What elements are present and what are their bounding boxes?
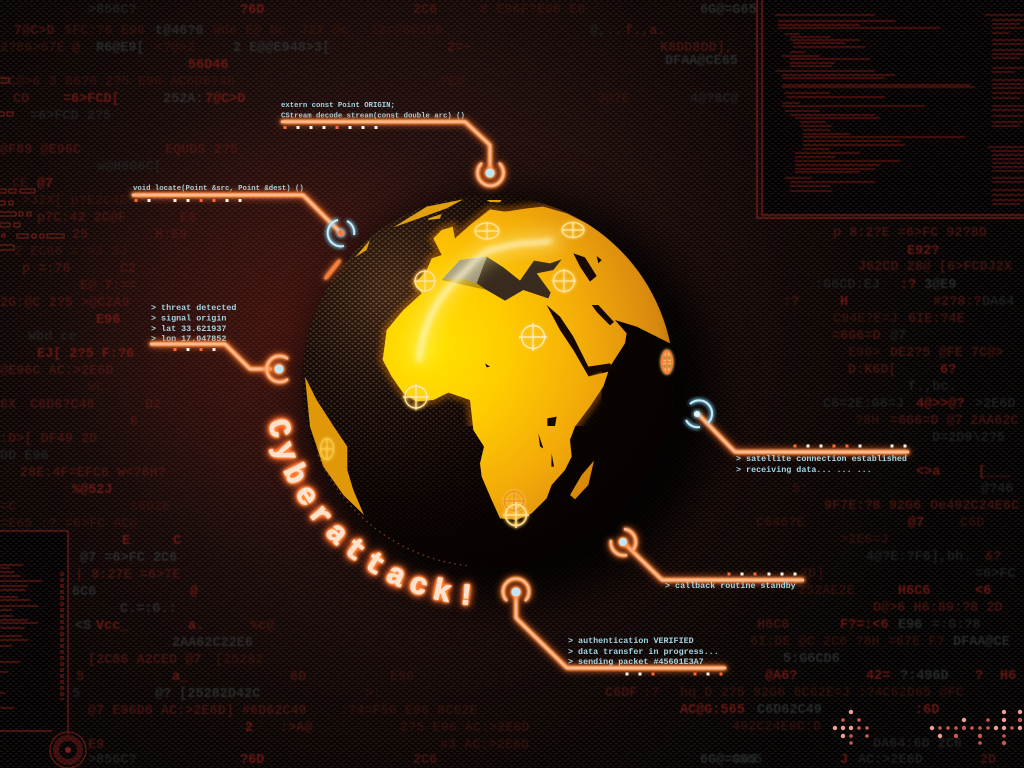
- background code text: scrolling hacker characters: 2 E@@E948>3[: [233, 41, 330, 56]
- background code text: scrolling hacker characters: 4@?8C@: [690, 92, 739, 107]
- background code text: scrolling hacker characters: DFAA@CE: [953, 635, 1010, 650]
- node icon: [328, 220, 354, 246]
- background code text: scrolling hacker characters: 2: [245, 721, 253, 736]
- node icon: [267, 356, 288, 382]
- background code text: scrolling hacker characters: E96>: [848, 346, 880, 361]
- reticle: North Africa: [519, 323, 547, 351]
- background code text: scrolling hacker characters: <6: [975, 584, 991, 599]
- text block: [568, 636, 719, 667]
- LED dot matrix arrow: [833, 710, 869, 745]
- background code text: scrolling hacker characters: @7: [37, 177, 53, 192]
- connector line: [132, 195, 341, 233]
- dial icon: [50, 732, 86, 768]
- background code text: scrolling hacker characters: Vcc_: [96, 619, 129, 634]
- background code text: scrolling hacker characters: @: [72, 41, 80, 56]
- background code text: scrolling hacker characters: 3@?E: [597, 92, 629, 107]
- background code text: scrolling hacker characters: 2 EC66 =:>3 3J: [14, 245, 127, 260]
- background code text: scrolling hacker characters: :G6CD:EJ: [815, 278, 880, 293]
- background code text: scrolling hacker characters: 2AA62C22E6: [172, 636, 253, 651]
- background code text: scrolling hacker characters: H: [840, 295, 848, 310]
- background code text: scrolling hacker characters: =G65: [730, 753, 762, 768]
- background code text: scrolling hacker characters: %@52J: [72, 483, 113, 498]
- background code text: scrolling hacker characters: p =:76: [22, 262, 71, 277]
- background code text: scrolling hacker characters: =6>FCD[: [63, 92, 120, 107]
- text block: > lon 17.047852: [151, 334, 226, 344]
- callout: callback routine (lower right): [611, 529, 804, 591]
- background code text: scrolling hacker characters: Wbd_ce: [28, 330, 77, 345]
- node icon: [686, 400, 712, 427]
- background code text: scrolling hacker characters: :>A@: [280, 721, 312, 736]
- background code text: scrolling hacker characters: CE: [12, 177, 28, 192]
- code text: extern const Point ORIGIN;: [281, 102, 395, 110]
- reticle: Iberia: [414, 270, 436, 292]
- text block: > authentication VERIFIED: [568, 636, 694, 646]
- background code text: scrolling hacker characters: 6D: [290, 670, 306, 685]
- background code text: scrolling hacker characters: CD: [13, 92, 29, 107]
- panel: code monitor top right: [757, 0, 1024, 218]
- background code text: scrolling hacker characters: | 8:27E =6>7E: [75, 568, 180, 583]
- background code text: scrolling hacker characters: D2: [145, 398, 161, 413]
- background code text: scrolling hacker characters: [2C86 A2CED @7: [88, 653, 201, 668]
- reticle: Europe: [475, 222, 499, 240]
- status dots: [794, 444, 906, 448]
- background code text: scrolling hacker characters: 2D]: [800, 567, 824, 582]
- reticle: limb east: [662, 350, 672, 374]
- background code text: scrolling hacker characters: R6@E9[: [96, 41, 145, 56]
- connector line: [516, 592, 726, 668]
- background code text: scrolling hacker characters: 5:G6CD6: [783, 652, 840, 667]
- background code text: scrolling hacker characters: 25: [72, 228, 88, 243]
- background code text: scrolling hacker characters: 2?5 E96 AC:>2E6D: [400, 721, 530, 736]
- background code text: scrolling hacker characters: =6>FCD 2?5: [30, 109, 111, 124]
- background code text: scrolling hacker characters: @?: [180, 262, 196, 277]
- background code text: scrolling hacker characters: 6X: [0, 398, 17, 413]
- background code text: scrolling hacker characters: <?@>2: [155, 41, 196, 56]
- background code text: scrolling hacker characters: 252AE2E: [798, 584, 855, 599]
- reticle: South Africa lower: [503, 502, 529, 528]
- text block: > lat 33.621937: [151, 324, 226, 334]
- background code text: scrolling hacker characters: J: [840, 753, 848, 768]
- background code text: scrolling hacker characters: =6>FC: [975, 567, 1016, 582]
- background code text: scrolling hacker characters: #2?8:?: [933, 295, 982, 310]
- background code text: scrolling hacker characters: D@>6 H6:89:?8 2D: [873, 601, 1003, 616]
- background code text: scrolling hacker characters: WC:: [88, 381, 112, 396]
- background code text: scrolling hacker characters: 7@C>D: [205, 92, 246, 107]
- Greenland strips: [355, 199, 502, 257]
- Red Sea, gulfs and lakes: [485, 253, 614, 467]
- background code text: scrolling hacker characters: C.=:G.:: [120, 602, 177, 617]
- status dots: [284, 126, 378, 129]
- background code text: scrolling hacker characters: DE2?5 @FE 7C@>: [890, 346, 1003, 361]
- background code text: scrolling hacker characters: >:: [365, 687, 381, 702]
- connector line: [698, 414, 909, 452]
- status dots: [728, 572, 796, 576]
- background code text: scrolling hacker characters: C6D6?C46: [30, 398, 95, 413]
- LED dot matrix waveform: [930, 710, 1022, 745]
- background code text: scrolling hacker characters: >856C?: [88, 3, 137, 18]
- small LED dash readouts at left edge: [0, 78, 64, 250]
- Bright light streak over Africa: [419, 238, 560, 362]
- text block: > receiving data... ... ...: [736, 465, 872, 475]
- background code text: scrolling hacker characters: @7: [890, 329, 906, 344]
- background code text: scrolling hacker characters: AC:>2E6D: [858, 753, 923, 768]
- Limb shading: [669, 341, 670, 342]
- background code text: scrolling hacker characters: ?:496D: [900, 669, 949, 684]
- background code text: scrolling hacker characters: 6I:DE @C 2C6 ?8H =67E F?: [750, 635, 944, 650]
- background code text: scrolling hacker characters: H6C6: [898, 584, 930, 599]
- background code text: scrolling hacker characters: f.,a.: [625, 24, 666, 39]
- background code text: scrolling hacker characters: ?E@: [440, 75, 464, 90]
- panel: code monitor bottom left with dial: [0, 531, 86, 768]
- background code text: scrolling hacker characters: H:E9: [155, 228, 187, 243]
- background code text: scrolling hacker characters: s6D2E: [130, 500, 171, 515]
- background code text: scrolling hacker characters: D=2D9\2?5: [932, 431, 1005, 446]
- background code text: scrolling hacker characters: EQUDS 2?5: [165, 143, 238, 158]
- background code text: scrolling hacker characters: C2: [120, 262, 136, 277]
- background code text: scrolling hacker characters: AC@G:565: [680, 703, 745, 718]
- background code text: scrolling hacker characters: E@ 7:==: [80, 279, 137, 294]
- background code text: scrolling hacker characters: :D>[ DF49 2D: [0, 432, 97, 447]
- background code text: scrolling hacker characters: EJ[ 2?5 F:?6: [37, 347, 134, 362]
- background code text: scrolling hacker characters: hq_D 2?5 92G6 8C62E=J :?4C62D65 @FC: [680, 686, 964, 701]
- background code text: scrolling hacker characters: a_: [172, 670, 189, 685]
- background code text: scrolling hacker characters: 492C24E6C:D: [732, 720, 821, 735]
- background code text: scrolling hacker characters: 9C@>6 3 86?6 2?5 E96 AC6D6?46: [0, 75, 235, 90]
- background code text: scrolling hacker characters: w@H6G6C[: [97, 160, 162, 175]
- background code text: scrolling hacker characters: 6: [130, 415, 138, 430]
- South America: [305, 377, 364, 515]
- background code text: scrolling hacker characters: J2X @c: [300, 24, 349, 39]
- background code text: scrolling hacker characters: @7 E96D6 AC:>2E6D] #6D62C49: [88, 704, 307, 719]
- background code text: scrolling hacker characters: @F89 @E96C: [0, 143, 81, 158]
- reticle: Middle East: [552, 269, 576, 293]
- callout: satellite connection (right): [686, 400, 909, 475]
- reticle: South Africa upper: [503, 490, 525, 512]
- connector line: [281, 122, 490, 172]
- background code text: scrolling hacker characters: DD E96: [0, 449, 49, 464]
- background code text: scrolling hacker characters: H6C6: [757, 618, 789, 633]
- background code text: scrolling hacker characters: @? [25282D42C: [155, 687, 260, 702]
- globe: [302, 195, 677, 567]
- background code text: scrolling hacker characters: Wde E@ bc: [213, 24, 286, 39]
- background code text: scrolling hacker characters: 252A:: [163, 92, 204, 107]
- background code text: scrolling hacker characters: 9F7E:?8 92G6: [824, 499, 921, 514]
- callout: decode stream (top): [281, 102, 504, 186]
- connector line: [623, 542, 804, 580]
- background code text: scrolling hacker characters: @E96C AC:>2E6D: [0, 364, 113, 379]
- background code text: scrolling hacker characters: F 5: [60, 670, 84, 685]
- background code text: scrolling hacker characters: @,..: [590, 24, 622, 39]
- status dots: [174, 348, 216, 351]
- background code text: scrolling hacker characters: 2G:@C 2?5 >@C2A9: [0, 296, 130, 311]
- text block: [736, 454, 907, 475]
- background code text: scrolling hacker characters: E92?: [907, 244, 939, 259]
- background code text: scrolling hacker characters: 5:: [792, 482, 808, 497]
- background code text: scrolling hacker characters: #3 AC:>2E6D: [440, 738, 529, 753]
- background code text: scrolling hacker characters: =:G:?8: [932, 618, 981, 633]
- mesh over Mediterranean: [442, 257, 562, 301]
- background code text: scrolling hacker characters: f.,bc.: [908, 380, 957, 395]
- background code text: scrolling hacker characters: 6G@=G65: [700, 3, 757, 18]
- background code text: scrolling hacker characters: =6G6=D @7: [890, 414, 963, 429]
- background code text: scrolling hacker characters: C6D: [960, 516, 984, 531]
- status dots: [134, 199, 242, 202]
- background code text: scrolling hacker characters: >856C?: [88, 753, 137, 768]
- dark halo behind globe: [307, 193, 717, 603]
- reticle: West Africa: [403, 384, 429, 410]
- background code text: scrolling hacker characters: C: [173, 534, 181, 549]
- background code text: scrolling hacker characters: 42=: [866, 669, 890, 684]
- background code text: scrolling hacker characters: ?6D: [240, 3, 264, 18]
- background code text: scrolling hacker characters: H6: [1000, 669, 1016, 684]
- background code text: scrolling hacker characters: DA64: [982, 295, 1014, 310]
- reticle: South America: [320, 438, 334, 460]
- background code text: scrolling hacker characters: p7C:42 2C@F: [37, 211, 126, 226]
- background code text: scrolling hacker characters: [25282: [215, 653, 264, 668]
- node icon: [611, 529, 636, 555]
- background code text: scrolling hacker characters: 2C6: [413, 3, 437, 18]
- node icon: [503, 579, 529, 601]
- background code text: scrolling hacker characters: Oe492C24E6C: [930, 499, 1019, 514]
- background code text: scrolling hacker characters: a.: [188, 619, 204, 634]
- background code text: scrolling hacker characters: :?: [643, 686, 659, 701]
- background code text: scrolling hacker characters: @: [190, 585, 198, 600]
- background code text: scrolling hacker characters: ?6D: [240, 753, 264, 768]
- background code text: scrolling hacker characters: E: [122, 534, 130, 549]
- text block: [151, 303, 236, 344]
- background code text: scrolling hacker characters: C94E?E=J: [833, 312, 898, 327]
- background code text: scrolling hacker characters: =E65 :? =6>FC AC@: [0, 517, 138, 532]
- background code text: scrolling hacker characters: :?: [900, 278, 916, 293]
- background code text: scrolling hacker characters: @7 =6>FC 2C6: [80, 551, 177, 566]
- background code text: scrolling hacker characters: 2?86>67E: [0, 41, 65, 56]
- background code text: scrolling hacker characters: @A6?: [765, 669, 797, 684]
- background code text: scrolling hacker characters: DA64:6D 2C6: [873, 737, 962, 752]
- background code text: scrolling hacker characters: >2E6D: [975, 397, 1016, 412]
- background code text: scrolling hacker characters: C6=2E:G6=J: [823, 397, 904, 412]
- code text: void locate(Point &src, Point &dest) (): [133, 185, 304, 193]
- background code text: scrolling hacker characters: C6DF: [605, 686, 637, 701]
- text block: > threat detected: [151, 303, 236, 313]
- background code text: scrolling hacker characters: 6C6: [72, 585, 96, 600]
- background code text: scrolling hacker characters: 4@>>@?: [916, 397, 965, 412]
- text block: > data transfer in progress...: [568, 647, 719, 657]
- callout: locate (upper left): [132, 185, 354, 279]
- background code text: scrolling hacker characters: 56D46: [188, 58, 229, 73]
- reticle: Russia: [562, 222, 584, 238]
- background code text: scrolling hacker characters: %c@: [250, 619, 274, 634]
- background code text: scrolling hacker characters: =6G6=D: [832, 329, 881, 344]
- callout: threat detected (left): [150, 303, 288, 382]
- background code text: scrolling hacker characters: t@46?6: [155, 24, 204, 39]
- continents: Africa, Europe, Arabia: [305, 199, 677, 520]
- code text: [281, 102, 465, 120]
- node icon: [478, 163, 504, 186]
- background code text: scrolling hacker characters: &?: [985, 550, 1001, 565]
- background code text: scrolling hacker characters: >2E6=J: [840, 533, 889, 548]
- text block: > signal origin: [151, 314, 226, 324]
- text block: > sending packet #45601E3A7: [568, 657, 704, 667]
- background code text: scrolling hacker characters: $FC:?6 E96: [64, 24, 145, 39]
- Madagascar: [570, 461, 594, 499]
- Mediterranean sea: [477, 257, 562, 301]
- background code text: scrolling hacker characters: D:K6D[: [848, 363, 897, 378]
- background code text: scrolling hacker characters: 28E:4F=EFC6 W<?6H?: [20, 466, 166, 481]
- background code text: scrolling hacker characters: 6G@=G65: [700, 753, 757, 768]
- text block: > satellite connection established: [736, 454, 907, 464]
- background code text: scrolling hacker characters: ?8H: [855, 414, 879, 429]
- background code text: scrolling hacker characters: E96: [898, 618, 922, 633]
- text block: > callback routine standby: [665, 581, 796, 591]
- lit globe rim dots: [318, 455, 470, 566]
- background code text: scrolling hacker characters: @7: [908, 516, 924, 531]
- target reticles on the globe: [320, 222, 672, 528]
- background code text: scrolling hacker characters: 3@E9: [924, 278, 956, 293]
- callout: authentication (bottom): [503, 579, 726, 676]
- title: Cyberattack! on curved path: Cyberattack!: [262, 411, 478, 612]
- background code text: scrolling hacker characters: 2D: [980, 753, 996, 768]
- status dots: [626, 672, 722, 676]
- background code text: scrolling hacker characters: [___: [978, 465, 1011, 480]
- background code text: scrolling hacker characters: C6D62C49: [757, 703, 822, 718]
- background code text: scrolling hacker characters: C646?E: [756, 516, 805, 531]
- background code text: scrolling hacker characters: :?4=F56 E96 8C62E: [340, 704, 478, 719]
- background code text: scrolling hacker characters: 8 E96F?E96 E0: [480, 3, 585, 18]
- Western Mediterranean highlight: [442, 257, 487, 283]
- background code text: scrolling hacker characters: 12=@6@2C6: [370, 24, 443, 39]
- background code text: scrolling hacker characters: E96: [390, 670, 414, 685]
- background code text: scrolling hacker characters: 5: [72, 687, 80, 702]
- background code text: scrolling hacker characters: :?: [783, 295, 799, 310]
- background code text: scrolling hacker characters: @?46: [981, 482, 1013, 497]
- background code text: scrolling hacker characters: E96: [96, 313, 120, 328]
- background code text: scrolling hacker characters: ?: [975, 669, 983, 684]
- connector line: [150, 344, 272, 369]
- background code text: scrolling hacker characters: 4@?E:?F6],bh.: [866, 550, 971, 565]
- background code text: scrolling hacker characters: >J2X[ p?E2C4E: [22, 194, 127, 209]
- background code text: scrolling hacker characters: J62CD 28@ [6>FCDJ2X: [858, 260, 1013, 275]
- background code text: scrolling hacker characters: =C: [0, 500, 16, 515]
- background code text: scrolling hacker characters: <>a: [916, 465, 940, 480]
- background code text: scrolling hacker characters: E9: [88, 738, 104, 753]
- background code text: scrolling hacker characters: E8: [180, 211, 196, 226]
- background code text: scrolling hacker characters: 6?: [940, 363, 956, 378]
- background code text: scrolling hacker characters: F?=:<6: [840, 618, 889, 633]
- background code text: scrolling hacker characters: 2=~: [447, 41, 471, 56]
- code text: CStream decode_stream(const double arc) (): [281, 112, 465, 120]
- short orange dash: [325, 260, 340, 279]
- background code text: scrolling hacker characters: <S: [75, 619, 91, 634]
- background code text: scrolling hacker characters: K8DD8DD],: [660, 41, 733, 56]
- background code text: scrolling hacker characters: :6D: [915, 703, 939, 718]
- background code text: scrolling hacker characters: p 8:2?E =6>FC 92?8D: [833, 226, 987, 241]
- background code text: scrolling hacker characters: 7@C>D: [14, 24, 55, 39]
- background code text: scrolling hacker characters: 2AA62C: [970, 414, 1019, 429]
- background code text: scrolling hacker characters: 2C6: [413, 753, 437, 768]
- background code text: scrolling hacker characters: 6IE:?4E: [908, 312, 965, 327]
- background code text: scrolling hacker characters: DFAA@CE65: [665, 54, 738, 69]
